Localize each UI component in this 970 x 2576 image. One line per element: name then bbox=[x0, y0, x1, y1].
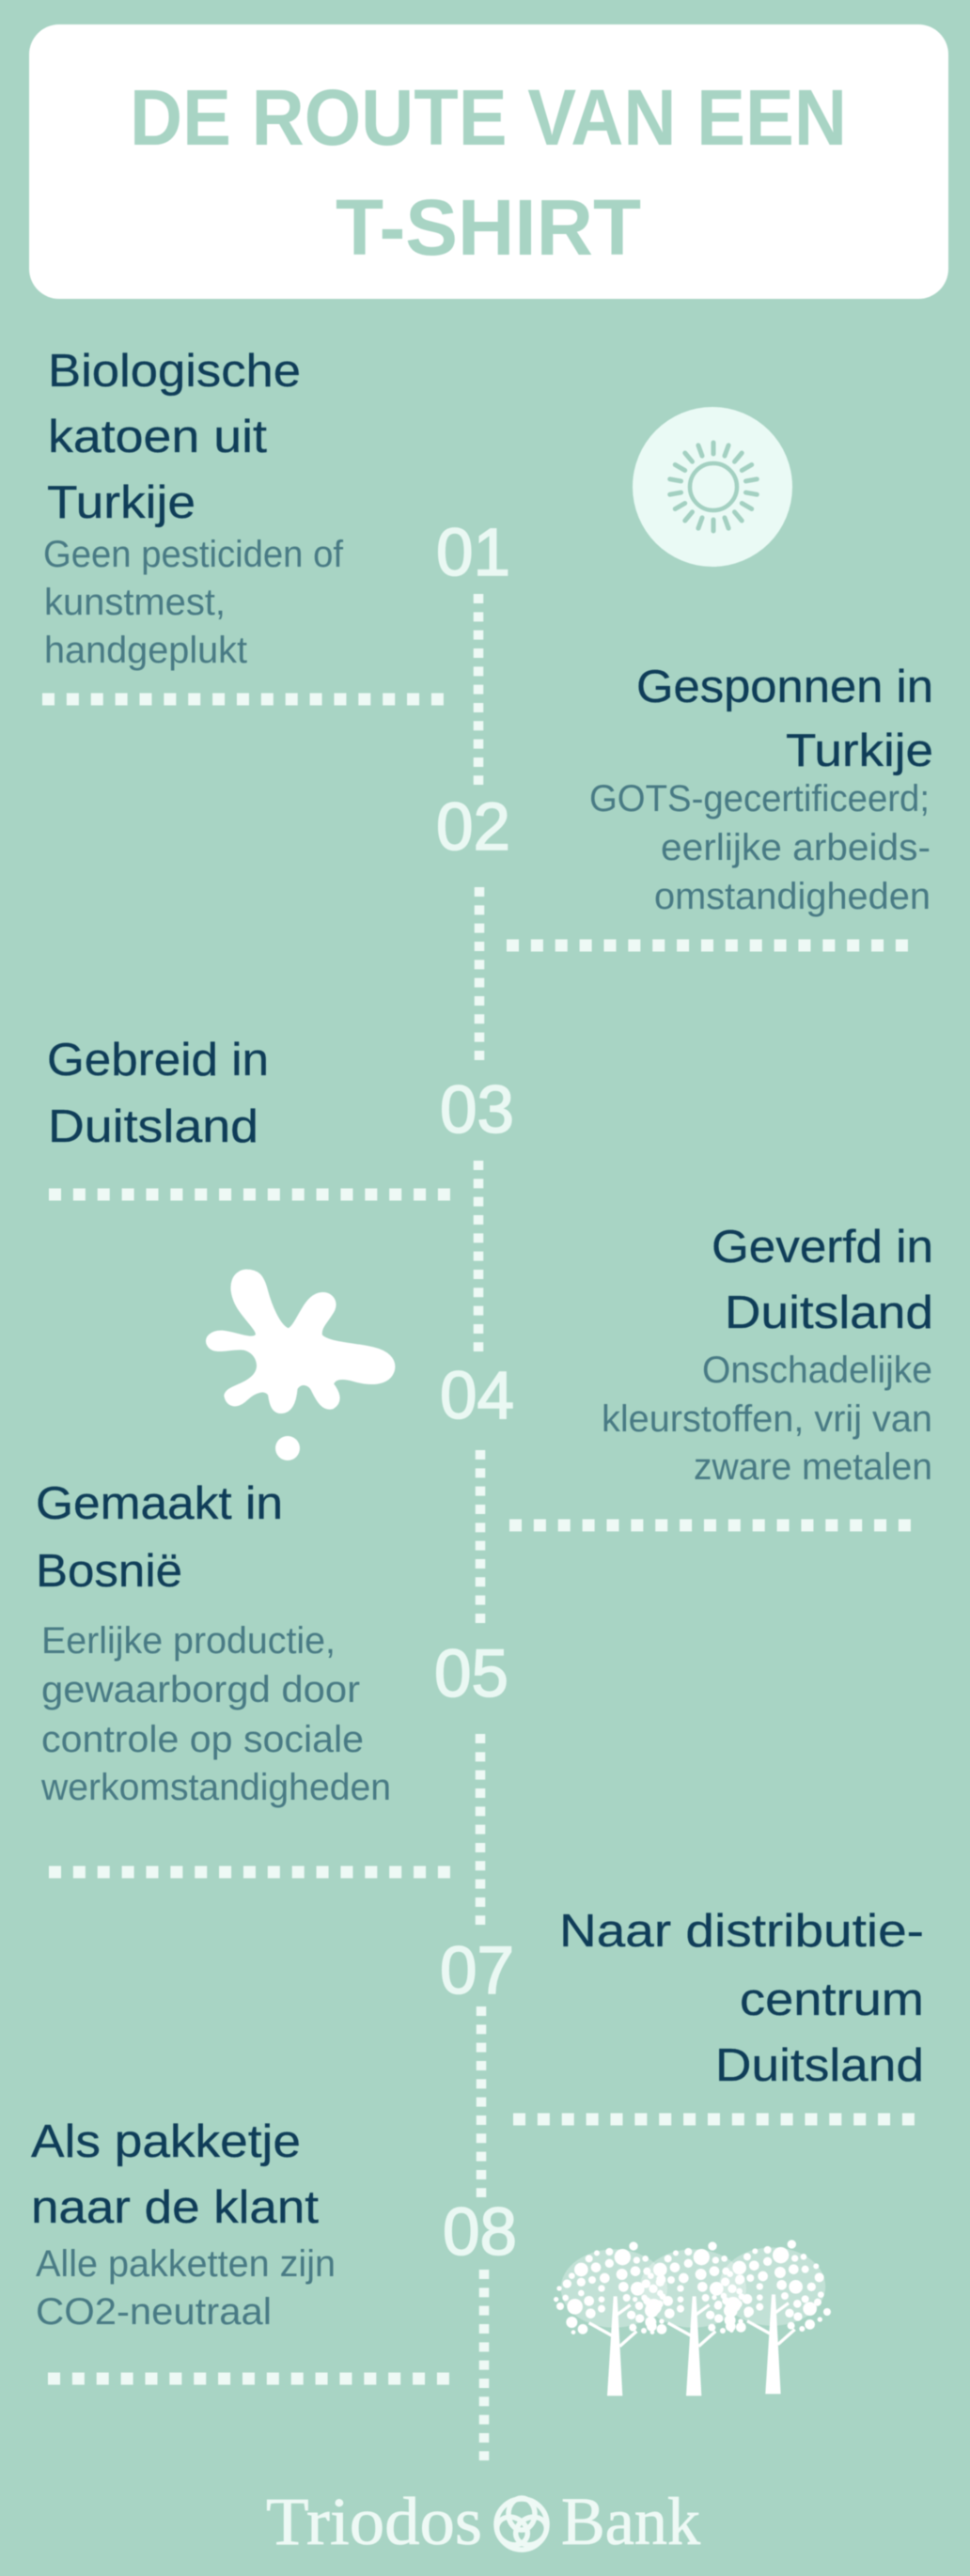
step 02: gesponnen bbox=[507, 662, 933, 945]
heading: Turkije bbox=[47, 477, 196, 528]
heading bbox=[47, 346, 301, 528]
heading: Gesponnen in bbox=[636, 662, 933, 712]
heading: Duitsland bbox=[48, 1101, 258, 1152]
number 08: 08 bbox=[443, 2195, 517, 2270]
description: CO2-neutraal bbox=[36, 2291, 272, 2333]
step 03: gebreid bbox=[47, 1035, 450, 1194]
description: Geen pesticiden of bbox=[43, 534, 344, 575]
heading: Biologische bbox=[48, 346, 301, 397]
heading bbox=[47, 1035, 269, 1152]
heading bbox=[31, 2116, 319, 2233]
description: zware metalen bbox=[694, 1446, 932, 1488]
step 01: biologisch katoen bbox=[42, 346, 444, 699]
heading: katoen uit bbox=[48, 412, 267, 462]
heading: Als pakketje bbox=[31, 2116, 301, 2167]
description: handgeplukt bbox=[44, 630, 247, 671]
description: omstandigheden bbox=[654, 876, 931, 917]
heading: naar de klant bbox=[31, 2182, 319, 2233]
heading bbox=[36, 1478, 283, 1597]
heading: Duitsland bbox=[725, 1288, 933, 1338]
description: kleurstoffen, vrij van bbox=[602, 1398, 932, 1440]
heading: Turkije bbox=[786, 726, 933, 776]
heading: Gemaakt in bbox=[36, 1478, 283, 1529]
description bbox=[602, 1350, 932, 1488]
logo: Triodos Bank: Bank bbox=[561, 2484, 700, 2559]
heading bbox=[559, 1906, 924, 2091]
description bbox=[36, 2243, 336, 2333]
heading: Gebreid in bbox=[47, 1035, 269, 1085]
description: kunstmest, bbox=[44, 582, 226, 623]
logo: Triodos Bank: Triodos bbox=[266, 2484, 482, 2559]
description: werkomstandigheden bbox=[40, 1767, 391, 1808]
number 01: 01 bbox=[436, 516, 510, 590]
step 07: distributie bbox=[513, 1906, 924, 2119]
heading: Bosnië bbox=[36, 1546, 182, 1597]
heading: Geverfd in bbox=[712, 1222, 933, 1272]
icon: trees bbox=[554, 2240, 831, 2396]
number 05: 05 bbox=[434, 1637, 508, 1711]
heading: Duitsland bbox=[715, 2040, 924, 2091]
icon: paint splash bbox=[209, 1272, 392, 1460]
title card bbox=[29, 24, 948, 299]
description: eerlijke arbeids- bbox=[661, 827, 931, 868]
title bbox=[130, 73, 847, 272]
step 04: geverfd bbox=[509, 1222, 933, 1525]
heading bbox=[712, 1222, 933, 1338]
description: Eerlijke productie, bbox=[41, 1620, 336, 1662]
icon: sun bbox=[633, 407, 792, 567]
logo symbol bbox=[492, 2498, 552, 2551]
step 05: gemaakt bbox=[36, 1478, 450, 1872]
description bbox=[589, 778, 931, 917]
number 04: 04 bbox=[440, 1359, 514, 1433]
title: T-SHIRT bbox=[336, 183, 641, 272]
heading bbox=[636, 662, 933, 776]
number 07: 07 bbox=[440, 1934, 514, 2008]
number 03: 03 bbox=[440, 1073, 514, 1147]
description bbox=[40, 1620, 391, 1808]
heading: Naar distributie- bbox=[559, 1906, 924, 1957]
description: GOTS-gecertificeerd; bbox=[589, 778, 930, 820]
description: controle op sociale bbox=[41, 1719, 364, 1760]
logo: Triodos Bank bbox=[266, 2484, 700, 2559]
description: Alle pakketten zijn bbox=[36, 2243, 336, 2285]
step 08: pakketje bbox=[31, 2116, 449, 2379]
description: gewaarborgd door bbox=[41, 1669, 360, 1710]
description: Onschadelijke bbox=[702, 1350, 932, 1391]
description bbox=[43, 534, 344, 671]
number 02: 02 bbox=[436, 790, 510, 865]
heading: centrum bbox=[740, 1975, 924, 2025]
title: DE ROUTE VAN EEN bbox=[130, 73, 847, 162]
